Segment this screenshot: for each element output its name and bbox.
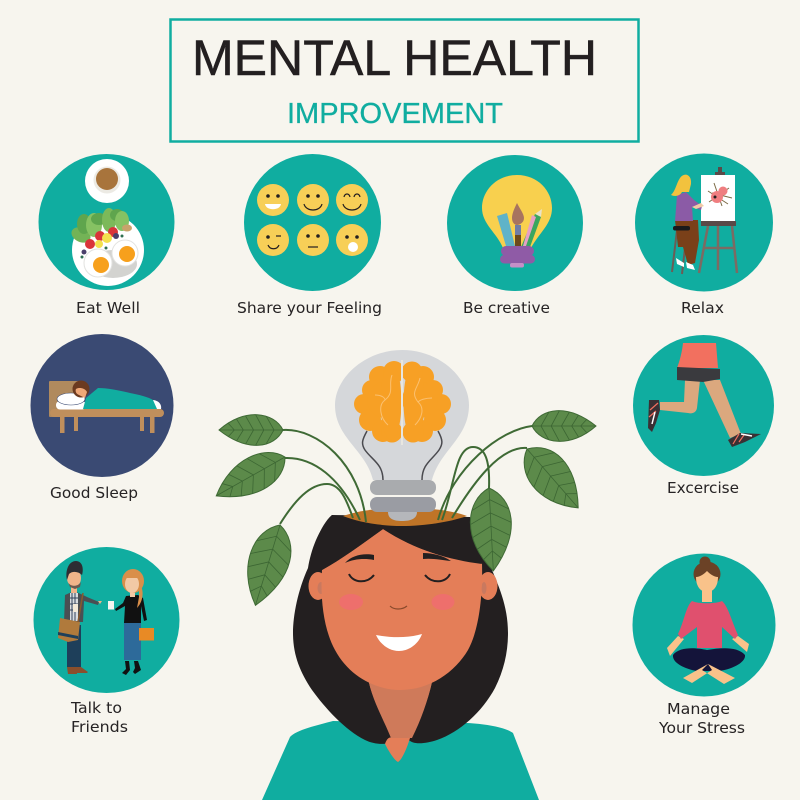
leaf right middle [508,433,597,524]
leaf left middle [206,438,296,515]
share circle [244,154,381,291]
icon: breakfast plate [69,208,144,286]
share label: Share your Feeling [237,299,382,317]
icon: running legs [648,343,761,447]
eat well label: Eat Well [76,299,140,317]
manage your stress label [658,700,745,737]
panel: share your feeling [237,154,382,317]
neck [368,678,432,762]
title: MENTAL HEALTH [192,30,597,86]
icon: brain [354,360,451,445]
icon: painter on stool [671,175,704,274]
leaf right bottom [463,487,519,572]
subtitle: IMPROVEMENT [287,98,503,130]
manage circle [632,554,776,696]
panel: relax [635,154,773,317]
eyebrows [345,553,451,563]
icon: person sleeping in bed [49,380,164,433]
hair back [293,515,508,744]
face [322,529,482,690]
panel: exercise [633,335,774,497]
panel: be creative [447,155,583,317]
be creative label: Be creative [463,299,550,317]
leaf left top [219,411,283,449]
icon: creative light bulb [482,175,552,268]
plant stems [280,426,532,524]
manage your stress label: Your Stress [658,719,745,737]
central figure: woman with light bulb and plants [206,350,597,800]
icon: coffee cup [85,159,129,203]
sleep circle [30,334,174,477]
title block [170,20,638,142]
leaf left bottom [232,518,304,613]
excercise label: Excercise [667,479,739,497]
icon: emoji faces [257,184,368,256]
relax label: Relax [681,299,724,317]
ears [308,572,498,600]
panel: good sleep [30,334,174,502]
manage your stress label: Manage [667,700,730,718]
smile [376,634,422,651]
leaf right top [532,407,596,445]
title frame [170,20,638,142]
talk to friends label [70,699,128,736]
cheeks [339,594,454,610]
panel: manage your stress [632,554,776,737]
hair fringe [308,515,482,570]
eat well circle [38,154,174,290]
icon: woman with cup and bag [108,569,154,675]
panel: talk to friends [34,547,180,736]
talk to friends label: Talk to [70,699,122,717]
nose [390,606,407,609]
creative circle [447,155,583,291]
relax circle [635,154,773,292]
good sleep label: Good Sleep [50,484,138,502]
soil [343,508,467,526]
panel: eat well [38,154,174,317]
talk to friends label: Friends [71,718,128,736]
shirt [262,721,539,800]
closed eyes [349,574,450,581]
talk circle [34,547,180,693]
icon: man with bag [58,561,102,674]
icon: easel with painting [699,167,737,273]
icon: light bulb [335,350,469,521]
exercise circle [633,335,774,476]
icon: meditating woman [667,556,749,684]
